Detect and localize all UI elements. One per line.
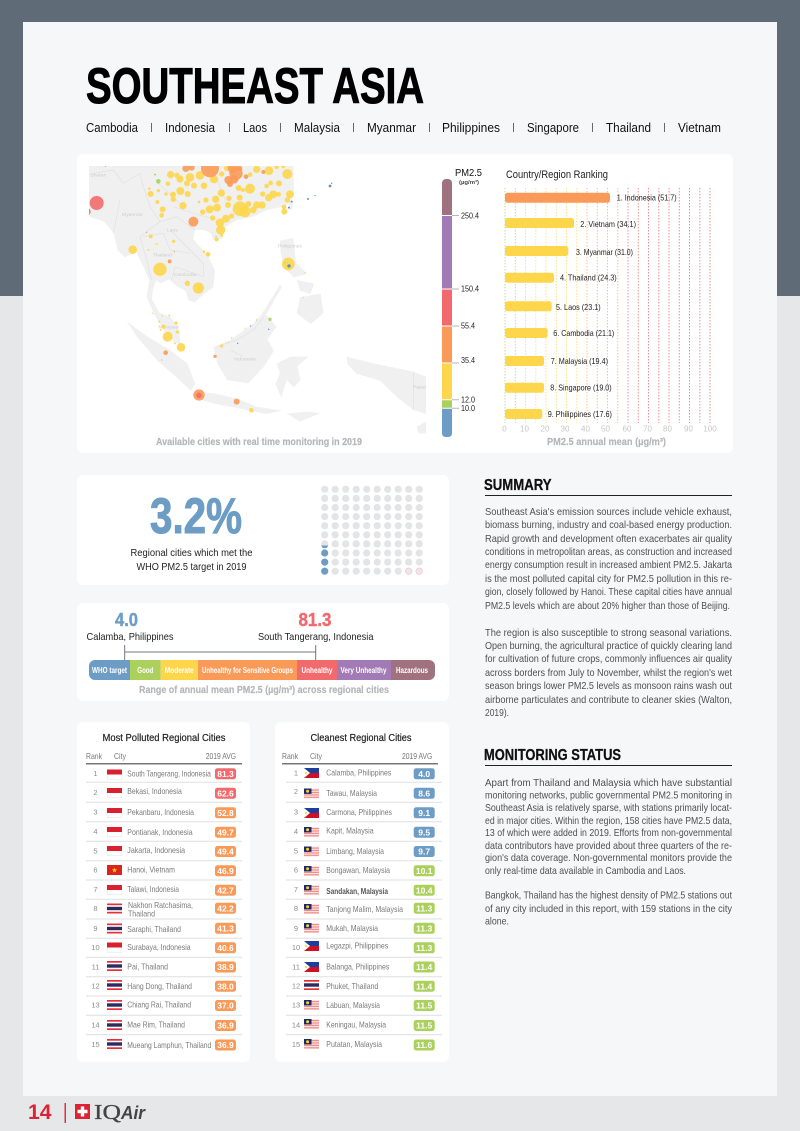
table rows: 11.3 [416, 943, 433, 953]
bar chart: country ranking: 30 [561, 424, 570, 434]
text block: summary: airborne particulates and contribute to cleaner skies (Walton, [485, 695, 732, 706]
table rows: Phuket, Thailand [326, 981, 379, 991]
description [130, 548, 253, 573]
text block: monitoring status: data contributors have provided about three quarters of the re- [485, 841, 732, 852]
country navigation: Indonesia [165, 120, 216, 135]
text block: summary: is the most polluted capital city for PM2.5 pollution in this re- [485, 574, 732, 585]
table rows: Pontianak, Indonesia [127, 827, 193, 837]
table rows: 15 [292, 1040, 300, 1049]
text block: summary [485, 507, 733, 719]
table rows: 6 [93, 866, 98, 874]
table rows: 37.0 [217, 1001, 234, 1011]
table rows: Bekasi, Indonesia [127, 786, 182, 796]
table rows: Bongawan, Malaysia [326, 865, 390, 875]
table rows: 11.3 [416, 903, 433, 913]
text block: summary: Open burning, the agricultural practice of quickly clearing land [485, 641, 732, 652]
table rows: 1 [294, 768, 298, 778]
map of Southeast Asia with city bubbles: Indonesia [234, 357, 256, 363]
AQI category bar: WHO target [92, 666, 127, 675]
text block: monitoring status [485, 778, 733, 928]
country navigation: Malaysia [294, 120, 341, 135]
logo wordmark: Air [120, 1102, 147, 1123]
map of Southeast Asia with city bubbles: Myanmar [122, 212, 143, 218]
country navigation: Myanmar [367, 120, 417, 135]
table rows: 38.0 [217, 981, 234, 991]
table rows: 8.6 [418, 788, 430, 798]
PM2.5 colour scale [442, 167, 482, 437]
panel: cleanest cities table [275, 722, 449, 1062]
map of Southeast Asia with city bubbles: Papua [413, 384, 427, 390]
table rows: Surabaya, Indonesia [127, 942, 191, 952]
table rows: 7 [294, 885, 298, 894]
text block: summary: 2019). [485, 708, 509, 719]
map of Southeast Asia with city bubbles: Philippines [278, 243, 303, 249]
lowest value: 4.0 [115, 610, 138, 630]
description: WHO PM2.5 target in 2019 [136, 562, 247, 573]
logo icon: Swiss cross [75, 1104, 90, 1119]
footer: page number and logo [28, 1100, 147, 1124]
table rows: 9.5 [418, 827, 430, 837]
text block: monitoring status: Southeast Asia is relatively sparse, with stations primarily locat- [485, 803, 732, 814]
table header: City [114, 751, 127, 761]
country navigation [86, 120, 721, 135]
table header: 2019 AVG [206, 751, 236, 761]
table rows: Hang Dong, Thailand [127, 981, 192, 991]
table rows [86, 768, 242, 1050]
table rows: 14 [292, 1020, 300, 1030]
PM2.5 colour scale: PM2.5 [455, 167, 482, 179]
logo wordmark: IQ [94, 1100, 121, 1124]
table rows: 36.9 [217, 1040, 234, 1050]
table rows: Nakhon Ratchasima, [128, 900, 193, 910]
text block: summary: season brings lower PM2.5 levels as monsoon rains wash out [485, 681, 732, 692]
table rows: 5 [93, 846, 98, 856]
table rows: Tawau, Malaysia [326, 788, 377, 798]
table rows: 52.8 [217, 808, 234, 818]
bar chart: country ranking: 10 [520, 424, 529, 434]
table heading: Most Polluted Regional Cities [102, 732, 226, 744]
table rows: 4 [93, 827, 98, 836]
table rows: 2 [294, 787, 298, 796]
text block: summary: biomass burning, industry and coal-based energy production. [485, 520, 732, 531]
table rows: Mueang Lamphun, Thailand [127, 1040, 212, 1050]
title: SOUTHEAST ASIA [86, 58, 424, 114]
bar chart: country ranking: 0 [502, 424, 507, 434]
page number: 14 [28, 1101, 52, 1124]
bar chart: country ranking: 50 [601, 424, 610, 434]
text block: monitoring status: 13 of which were added in 2019. Efforts from non-governmental [485, 828, 732, 839]
table rows: 4.0 [418, 769, 430, 779]
bar chart: country ranking [502, 188, 717, 434]
PM2.5 colour scale: 12.0 [461, 394, 475, 404]
panel: WHO target share [77, 475, 449, 585]
PM2.5 colour scale: 150.4 [461, 284, 479, 294]
table rows: 14 [91, 1020, 100, 1030]
table rows: 4 [294, 827, 298, 836]
AQI category bar: Hazardous [396, 666, 428, 675]
map of Southeast Asia with city bubbles: Bhutan [90, 173, 106, 179]
text block: summary: for cultivation of future crops, commonly influences air quality [485, 654, 733, 665]
table rows: 49.7 [217, 827, 234, 837]
highest value: 81.3 [298, 610, 332, 630]
bar chart: country ranking: 4. Thailand (24.3) [560, 272, 617, 282]
table rows: 46.9 [217, 866, 234, 876]
table rows: 36.9 [217, 1021, 234, 1031]
bar chart: country ranking: 40 [581, 424, 590, 434]
text block: monitoring status: Bangkok, Thailand has the highest density of PM2.5 stations out [485, 890, 732, 902]
PM2.5 colour scale: 55.4 [461, 320, 475, 330]
table rows: Thailand [128, 908, 155, 918]
table rows: 11 [92, 962, 99, 972]
table header: Rank [282, 751, 299, 761]
text block: monitoring status: only real-time data available in Cambodia and Laos. [485, 866, 686, 877]
lowest city: Calamba, Philippines [86, 631, 174, 643]
table rows: 38.9 [217, 962, 234, 972]
table rows: Legazpi, Philippines [326, 940, 388, 950]
map of Southeast Asia with city bubbles: Laos [167, 227, 178, 233]
country navigation: Cambodia [86, 120, 139, 135]
big number: 3.2% [150, 488, 242, 544]
table rows: 9 [294, 924, 298, 933]
bar chart: country ranking: 60 [623, 424, 632, 434]
table rows: 3 [93, 808, 98, 816]
table rows: 11.4 [416, 981, 433, 991]
AQI category bar: Good [137, 666, 153, 675]
text block: summary: gion, closely followed by Hanoi. These capital cities have annual [485, 587, 732, 598]
table rows: Hanoi, Vietnam [127, 864, 175, 874]
bar chart: country ranking: 3. Myanmar (31.0) [576, 247, 633, 257]
text block: summary: Rapid growth and development often exacerbates air quality [485, 534, 733, 545]
table rows: 41.3 [217, 924, 234, 934]
logo wordmark [94, 1100, 147, 1124]
table rows: 13 [91, 1000, 100, 1010]
AQI category bar: Unhealthy [302, 666, 333, 675]
bar chart: country ranking: 6. Cambodia (21.1) [553, 328, 614, 338]
table rows: Talawi, Indonesia [127, 884, 179, 894]
table rows: 15 [91, 1040, 100, 1049]
table rows: 13 [292, 1000, 300, 1010]
table rows: Kapit, Malaysia [326, 826, 374, 836]
text block: monitoring status: monitoring networks, public governmental PM2.5 monitoring in [485, 790, 732, 802]
map of Southeast Asia with city bubbles: Malaysia [158, 324, 178, 330]
text block: summary: across borders from July to November, whilst the region's wet [485, 668, 732, 679]
country navigation: Singapore [527, 120, 579, 135]
table rows: 6 [294, 866, 298, 874]
table rows: 10.1 [416, 866, 433, 876]
table rows: 11 [292, 962, 300, 972]
country navigation: Vietnam [678, 120, 721, 135]
bar chart: country ranking: 90 [684, 424, 693, 434]
AQI category bar: Moderate [165, 666, 194, 675]
table rows: 9.1 [418, 808, 430, 818]
highest city: South Tangerang, Indonesia [258, 631, 374, 643]
range bracket [125, 645, 316, 660]
table header [282, 751, 438, 764]
table header: City [310, 751, 323, 761]
bar chart: country ranking: 9. Philippines (17.6) [548, 409, 612, 419]
table rows: South Tangerang, Indonesia [127, 768, 211, 778]
PM2.5 colour scale: 35.4 [461, 355, 475, 365]
description: Regional cities which met the [130, 548, 253, 559]
table rows: 62.6 [217, 788, 234, 798]
table rows: 49.4 [217, 847, 234, 857]
table rows: Pai, Thailand [127, 962, 168, 972]
table rows: 81.3 [217, 769, 234, 779]
table header: 2019 AVG [402, 751, 432, 761]
panel: most polluted cities table [77, 722, 250, 1062]
table rows: 10 [91, 943, 100, 952]
AQI category bar [89, 660, 435, 680]
bar chart: country ranking: 70 [643, 424, 652, 434]
table rows: 8 [93, 904, 98, 913]
map of Southeast Asia with city bubbles: Thailand [153, 253, 172, 259]
text block: summary: conditions in metropolitan areas, as construction and increased [485, 547, 732, 558]
AQI category bar: Very Unhealthy [340, 666, 387, 675]
text block: monitoring status: Apart from Thailand and Malaysia which have substantial [485, 778, 732, 789]
table rows: Mae Rim, Thailand [127, 1020, 185, 1030]
table rows: 40.6 [217, 943, 234, 953]
table rows: Sandakan, Malaysia [326, 886, 388, 896]
country navigation: Laos [243, 120, 267, 135]
table rows: Pekanbaru, Indonesia [127, 807, 194, 817]
table rows: 11.6 [416, 1040, 433, 1050]
table header: Rank [86, 751, 103, 761]
table rows: Tanjong Malim, Malaysia [326, 904, 403, 914]
table rows: Carmona, Philippines [326, 807, 392, 817]
bar chart: country ranking: 100 [703, 424, 717, 434]
map of Southeast Asia with city bubbles: Cambodia [174, 272, 197, 278]
bar chart: country ranking: 80 [663, 424, 672, 434]
table rows: 11.5 [416, 1021, 433, 1031]
dot matrix [321, 486, 423, 575]
table rows: 10 [292, 943, 300, 952]
text block: summary: Southeast Asia's emission sources include vehicle exhaust, [485, 507, 732, 518]
text block: summary: PM2.5 levels which are about 20% higher than those of Beijing. [485, 601, 730, 612]
map of Southeast Asia with city bubbles [83, 159, 427, 433]
AQI category bar: Unhealthy for Sensitive Groups [202, 666, 293, 675]
table rows [286, 768, 442, 1050]
table rows: 5 [294, 846, 298, 856]
table rows: 2 [93, 788, 98, 797]
table rows: 12 [91, 982, 100, 990]
country navigation: Philippines [442, 120, 500, 135]
PM2.5 colour scale: (µg/m³) [459, 179, 479, 186]
table rows: 7 [93, 885, 98, 894]
table rows: Keningau, Malaysia [326, 1020, 386, 1030]
PM2.5 colour scale: 250.4 [461, 210, 479, 220]
heading: country ranking: Country/Region Ranking [506, 169, 608, 181]
table rows: 42.7 [217, 885, 234, 895]
bar chart: country ranking: 7. Malaysia (19.4) [551, 356, 608, 366]
table rows: Chiang Rai, Thailand [127, 1000, 191, 1010]
table rows: 3 [294, 808, 298, 816]
PM2.5 colour scale: 10.0 [461, 403, 475, 413]
panel: range of annual means [77, 603, 449, 701]
country navigation: Thailand [606, 120, 651, 135]
table heading: Cleanest Regional Cities [310, 732, 412, 744]
table rows: Putatan, Malaysia [326, 1039, 382, 1049]
table rows: 8 [294, 904, 298, 913]
table rows: 9 [93, 924, 98, 933]
heading: monitoring status: MONITORING STATUS [484, 747, 621, 764]
table rows: 11.4 [416, 962, 433, 972]
bar chart: country ranking: 20 [541, 424, 550, 434]
table rows: Saraphi, Thailand [127, 924, 181, 934]
table rows: 9.7 [418, 847, 430, 857]
table rows: Limbang, Malaysia [326, 846, 384, 856]
range caption: Range of annual mean PM2.5 (µg/m³) across regional cities [139, 684, 389, 696]
heading: summary: SUMMARY [484, 477, 552, 494]
table rows: 11.3 [416, 924, 433, 934]
text block: monitoring status: alone. [485, 916, 509, 928]
bar chart: country ranking: 5. Laos (23.1) [556, 302, 601, 312]
table rows: Balanga, Philippines [326, 962, 389, 972]
bar chart: country ranking: 1. Indonesia (51.7) [617, 192, 677, 202]
bar chart: country ranking: 8. Singapore (19.0) [550, 382, 612, 392]
bar chart: country ranking: 2. Vietnam (34.1) [580, 219, 636, 229]
table rows: 1 [93, 769, 98, 778]
text block: monitoring status: gion's data coverage. Non-governmental monitors provide the [485, 853, 732, 864]
table rows: Labuan, Malaysia [326, 1000, 380, 1010]
table rows: 42.2 [217, 903, 234, 913]
table rows: 11.5 [416, 1001, 433, 1011]
table rows: Calamba, Philippines [326, 768, 391, 778]
text block: summary: energy consumption result in increased ambient PM2.5. Jakarta [485, 560, 732, 571]
text block: monitoring status: of any city included in this report, with 159 stations in the city [485, 904, 733, 915]
table header [86, 751, 242, 764]
table rows: 10.4 [416, 885, 433, 895]
table rows: Mukah, Malaysia [326, 923, 378, 933]
table rows: Jakarta, Indonesia [127, 845, 185, 855]
text block: monitoring status: ed in major cities. Within the region, 158 cities have PM2.5 data, [485, 816, 732, 827]
panel: map and ranking [77, 154, 733, 453]
chart caption: PM2.5 annual mean (µg/m³) [547, 436, 666, 448]
table rows: 12 [292, 982, 300, 990]
divider [64, 1103, 66, 1123]
text block: summary: The region is also susceptible to strong seasonal variations. [485, 628, 732, 639]
map caption: Available cities with real time monitoring in 2019 [156, 436, 362, 448]
